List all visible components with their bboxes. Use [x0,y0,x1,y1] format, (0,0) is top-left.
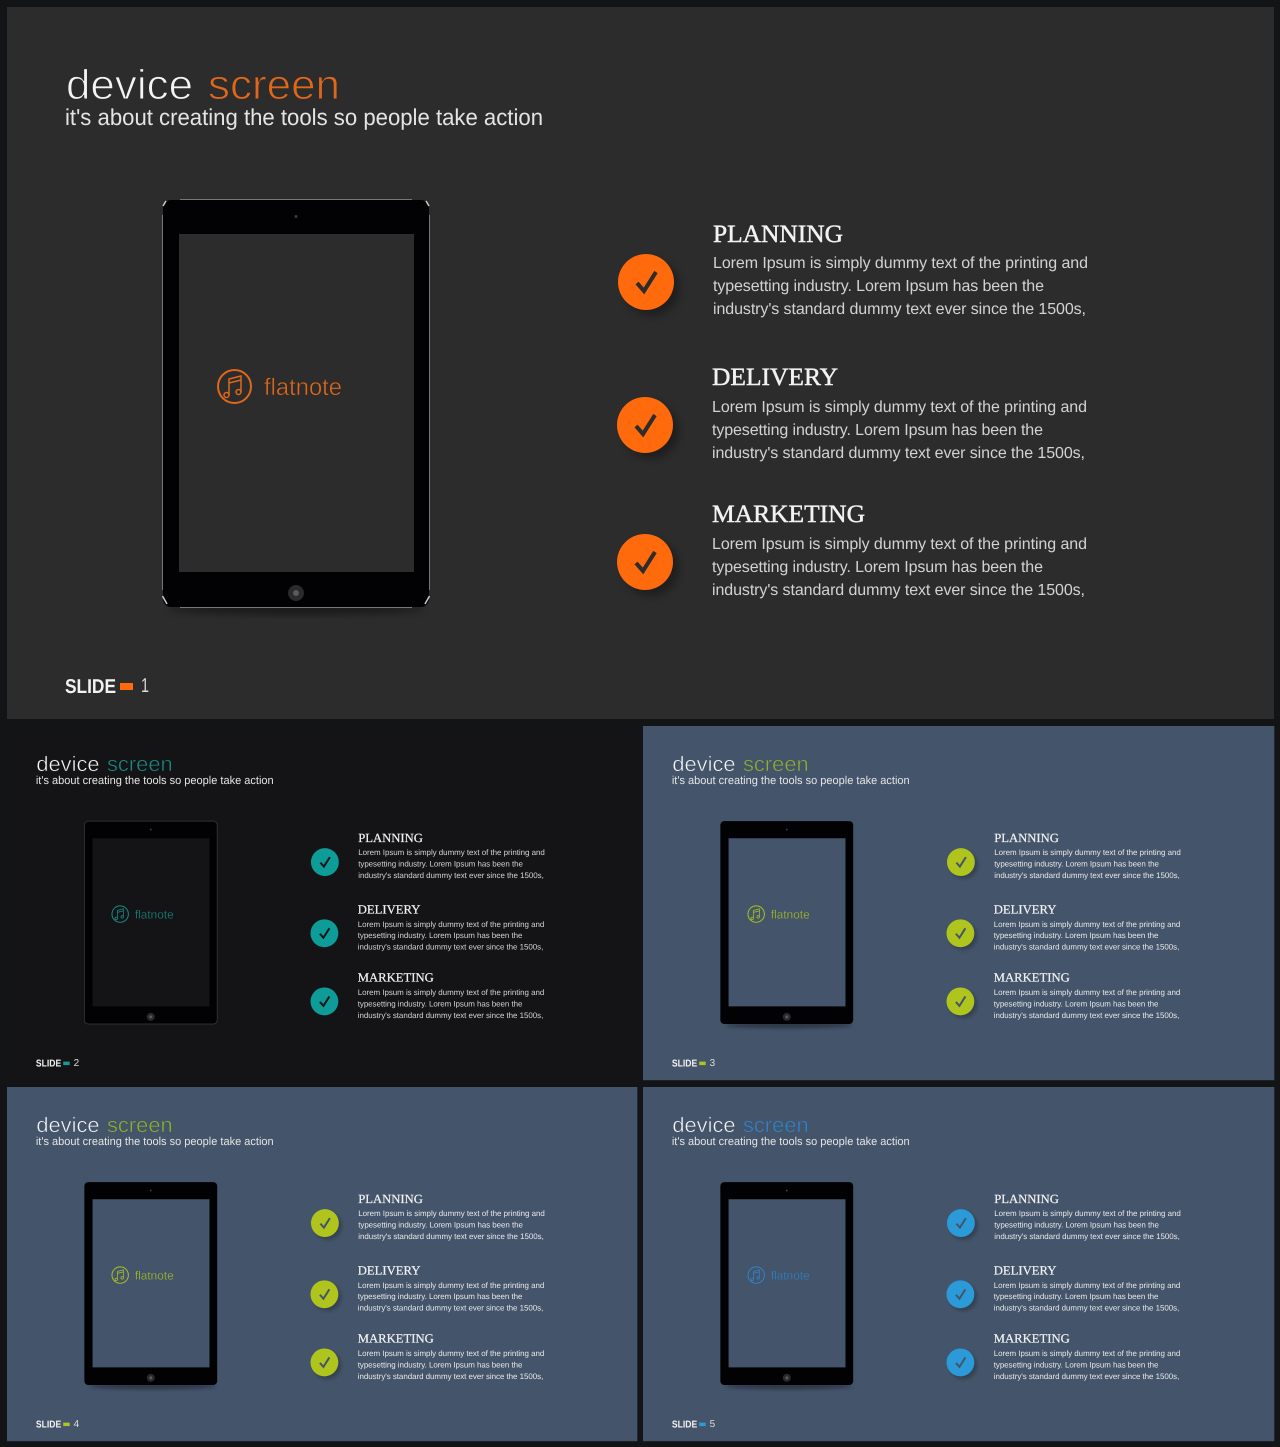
item: planning: typesetting industry. Lorem Ipsum has been the [994,860,1159,869]
panel: slide 4 [7,1087,637,1441]
item: marketing: typesetting industry. Lorem Ipsum has been the [994,1000,1158,1008]
item: marketing [310,1332,544,1381]
slide number: 1 [141,675,149,697]
slide number [36,1058,79,1069]
slide number: 2 [74,1058,79,1069]
item: planning: PLANNING [358,1193,423,1206]
item: delivery [310,1264,544,1313]
title: screen [107,752,173,776]
title: screen [107,1113,173,1137]
item: delivery: DELIVERY [994,1264,1056,1277]
item: delivery: typesetting industry. Lorem Ipsum has been the [994,1293,1158,1301]
item: planning: PLANNING [713,221,843,248]
panel: slide 3 [643,726,1274,1080]
title: device [36,1113,100,1137]
item: marketing: industry's standard dummy text ever since the 1500s, [358,1011,543,1020]
flatnote logo: flatnote [264,374,342,401]
item: delivery: Lorem Ipsum is simply dummy text of the printing and [358,920,544,929]
flatnote logo [748,906,810,922]
slide number: 4 [74,1419,79,1430]
tablet device [84,1182,217,1389]
flatnote logo [112,1267,174,1283]
item: delivery: typesetting industry. Lorem Ipsum has been the [358,1293,522,1301]
tablet device [162,200,430,614]
panel: slide 5 [643,1087,1274,1441]
item: planning: industry's standard dummy text ever since the 1500s, [994,1233,1180,1241]
item: delivery: industry's standard dummy text ever since the 1500s, [712,445,1085,462]
item: planning [618,221,1088,318]
item: marketing: MARKETING [358,971,434,985]
item: delivery: industry's standard dummy text ever since the 1500s, [994,1304,1179,1313]
item: marketing: industry's standard dummy text ever since the 1500s, [994,1372,1179,1381]
slide number: SLIDE [65,676,116,698]
item: marketing [617,501,1087,599]
item: marketing [946,1332,1180,1381]
item: marketing: Lorem Ipsum is simply dummy text of the printing and [358,1349,544,1358]
flatnote logo: flatnote [135,1269,174,1282]
panel: slide 2 [7,726,637,1080]
item: delivery [946,1264,1180,1313]
item: planning [947,1193,1181,1241]
item: planning: Lorem Ipsum is simply dummy text of the printing and [713,255,1088,272]
title [66,61,340,108]
slide number: SLIDE [672,1419,697,1430]
slide number [672,1419,715,1430]
item: planning: industry's standard dummy text ever since the 1500s, [994,872,1180,880]
item: marketing: MARKETING [712,501,865,528]
tablet device [84,821,217,1024]
item: marketing: typesetting industry. Lorem Ipsum has been the [994,1361,1158,1369]
panel: slide 1 [7,7,1274,719]
item: marketing: industry's standard dummy text ever since the 1500s, [994,1011,1179,1020]
title: device [672,752,736,776]
item: planning: Lorem Ipsum is simply dummy text of the printing and [358,849,545,857]
flatnote logo [748,1267,810,1283]
item: planning: typesetting industry. Lorem Ipsum has been the [713,278,1044,295]
item: delivery: Lorem Ipsum is simply dummy text of the printing and [994,920,1180,929]
tablet device [720,1182,853,1389]
item: delivery: industry's standard dummy text ever since the 1500s, [358,943,543,952]
item: delivery [310,903,544,952]
item: planning [947,832,1181,880]
item: delivery: typesetting industry. Lorem Ipsum has been the [712,422,1043,439]
title: screen [208,61,340,108]
item: delivery: typesetting industry. Lorem Ipsum has been the [994,932,1158,940]
item: delivery: DELIVERY [358,1264,420,1277]
item: marketing: industry's standard dummy text ever since the 1500s, [358,1372,543,1381]
slide number [36,1419,79,1430]
item: planning: Lorem Ipsum is simply dummy text of the printing and [994,849,1181,857]
subtitle: it's about creating the tools so people take action [672,1135,910,1147]
item: marketing: industry's standard dummy text ever since the 1500s, [712,582,1085,599]
title [36,752,173,776]
slide number: SLIDE [672,1058,697,1069]
slide number: 5 [710,1419,715,1430]
slide number: SLIDE [36,1419,61,1430]
title: screen [743,1113,809,1137]
item: delivery: DELIVERY [994,903,1056,916]
item: planning [311,1193,545,1241]
item: delivery [617,364,1087,462]
flatnote logo [218,370,342,403]
item: marketing: Lorem Ipsum is simply dummy text of the printing and [994,1349,1180,1358]
title [672,1113,809,1137]
item: planning: typesetting industry. Lorem Ipsum has been the [358,1221,523,1230]
item: planning: industry's standard dummy text ever since the 1500s, [358,1233,544,1241]
item: planning: industry's standard dummy text ever since the 1500s, [713,301,1086,318]
item: marketing: MARKETING [994,971,1070,985]
item: marketing [310,971,544,1020]
item: marketing: typesetting industry. Lorem Ipsum has been the [712,559,1043,576]
item: planning: typesetting industry. Lorem Ipsum has been the [358,860,523,869]
item: marketing: Lorem Ipsum is simply dummy text of the printing and [358,988,544,997]
subtitle: it's about creating the tools so people take action [36,1135,274,1147]
tablet device [720,821,853,1028]
flatnote logo: flatnote [771,1269,810,1282]
slide number [65,675,149,698]
slide number: SLIDE [36,1058,61,1069]
title: device [36,752,100,776]
title: device [672,1113,736,1137]
slide number: 3 [710,1058,715,1069]
item: marketing: MARKETING [994,1332,1070,1346]
item: planning: PLANNING [994,832,1059,845]
item: delivery: industry's standard dummy text ever since the 1500s, [358,1304,543,1313]
item: marketing [946,971,1180,1020]
item: marketing: typesetting industry. Lorem Ipsum has been the [358,1000,522,1008]
item: marketing: typesetting industry. Lorem Ipsum has been the [358,1361,522,1369]
title [672,752,809,776]
title [36,1113,173,1137]
item: delivery: Lorem Ipsum is simply dummy text of the printing and [358,1281,544,1290]
item: marketing: Lorem Ipsum is simply dummy text of the printing and [994,988,1180,997]
item: delivery: DELIVERY [358,903,420,916]
item: delivery: Lorem Ipsum is simply dummy text of the printing and [994,1281,1180,1290]
item: delivery: industry's standard dummy text ever since the 1500s, [994,943,1179,952]
item: planning: typesetting industry. Lorem Ipsum has been the [994,1221,1159,1230]
item: marketing: Lorem Ipsum is simply dummy text of the printing and [712,536,1087,553]
subtitle: it's about creating the tools so people take action [36,774,274,786]
item: delivery: DELIVERY [712,364,838,391]
item: planning [311,832,545,880]
item: delivery [946,903,1180,952]
item: planning: PLANNING [994,1193,1059,1206]
item: planning: industry's standard dummy text ever since the 1500s, [358,872,544,880]
slide number [672,1058,715,1069]
item: planning: PLANNING [358,832,423,845]
title: device [66,61,193,108]
flatnote logo: flatnote [135,908,174,921]
title: screen [743,752,809,776]
item: marketing: MARKETING [358,1332,434,1346]
item: delivery: Lorem Ipsum is simply dummy text of the printing and [712,399,1087,416]
subtitle: it's about creating the tools so people take action [672,774,910,786]
item: delivery: typesetting industry. Lorem Ipsum has been the [358,932,522,940]
flatnote logo [112,906,174,922]
flatnote logo: flatnote [771,908,810,921]
item: planning: Lorem Ipsum is simply dummy text of the printing and [994,1210,1181,1218]
item: planning: Lorem Ipsum is simply dummy text of the printing and [358,1210,545,1218]
subtitle: it's about creating the tools so people take action [65,104,543,130]
